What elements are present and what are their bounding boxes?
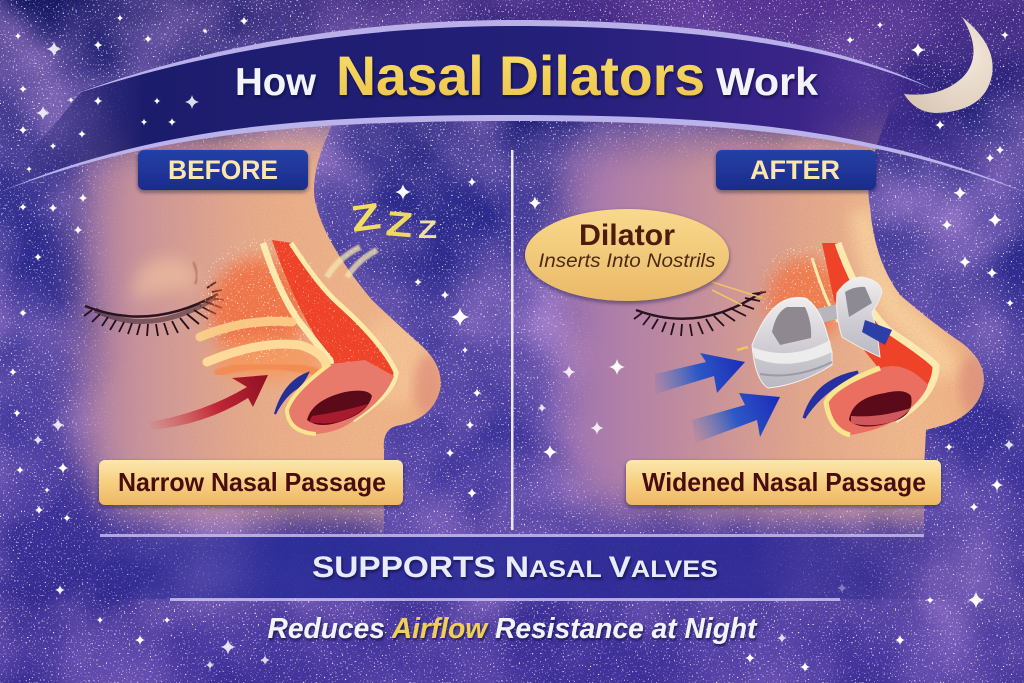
title: Work [716,61,818,104]
vertical divider [511,150,514,530]
widened passage label [626,460,941,505]
airflow streaks [200,321,292,337]
before badge: BEFORE [168,155,278,185]
crescent moon [904,17,993,113]
snoring zzz: Z [348,195,383,241]
red arrow [150,375,268,430]
header arc bottom [0,115,1024,192]
inflamed nasal passage [272,240,397,420]
nostril [826,366,928,435]
blue airflow arrows [655,347,780,443]
header arc top [75,20,935,94]
closed eye [634,282,766,336]
cream cartilage outline [812,243,936,420]
snoring zzz: Z [418,215,437,243]
dilator callout: Inserts Into Nostrils [538,251,716,272]
footer rule top [100,534,924,537]
blue crescent [275,373,308,414]
face silhouette [85,135,505,515]
warm glow [760,245,850,342]
header band [0,23,1024,190]
nasal dilator device [752,277,892,388]
snoring zzz [327,195,437,277]
footer heading: SUPPORTS N ASAL VALVES [312,551,718,584]
title: Nasal Dilators [336,44,705,107]
footer band [40,537,984,599]
title [235,44,818,107]
panel: after face [565,135,1005,520]
narrow passage label: Narrow Nasal Passage [118,467,386,497]
dilator callout: Dilator [579,219,675,252]
after badge: AFTER [750,155,840,185]
passage speckle [274,241,389,371]
warm glow [200,238,325,380]
after badge [716,150,876,190]
footer tagline: Reduces Airflow Resistance at Night [268,613,758,645]
widened passage label: Widened Nasal Passage [642,467,926,497]
nostril [287,360,394,434]
footer rule bottom [170,598,840,601]
title: How [235,61,317,104]
snoring zzz: Z [384,204,414,245]
cream cartilage outline [263,243,396,420]
closed eye [84,257,224,336]
dilator callout [525,209,729,301]
panel: before face [84,135,505,515]
narrow passage label [99,460,403,505]
nasal passage [822,243,936,420]
face silhouette [565,135,1005,520]
before badge [138,150,308,190]
blue crescent [804,372,858,418]
